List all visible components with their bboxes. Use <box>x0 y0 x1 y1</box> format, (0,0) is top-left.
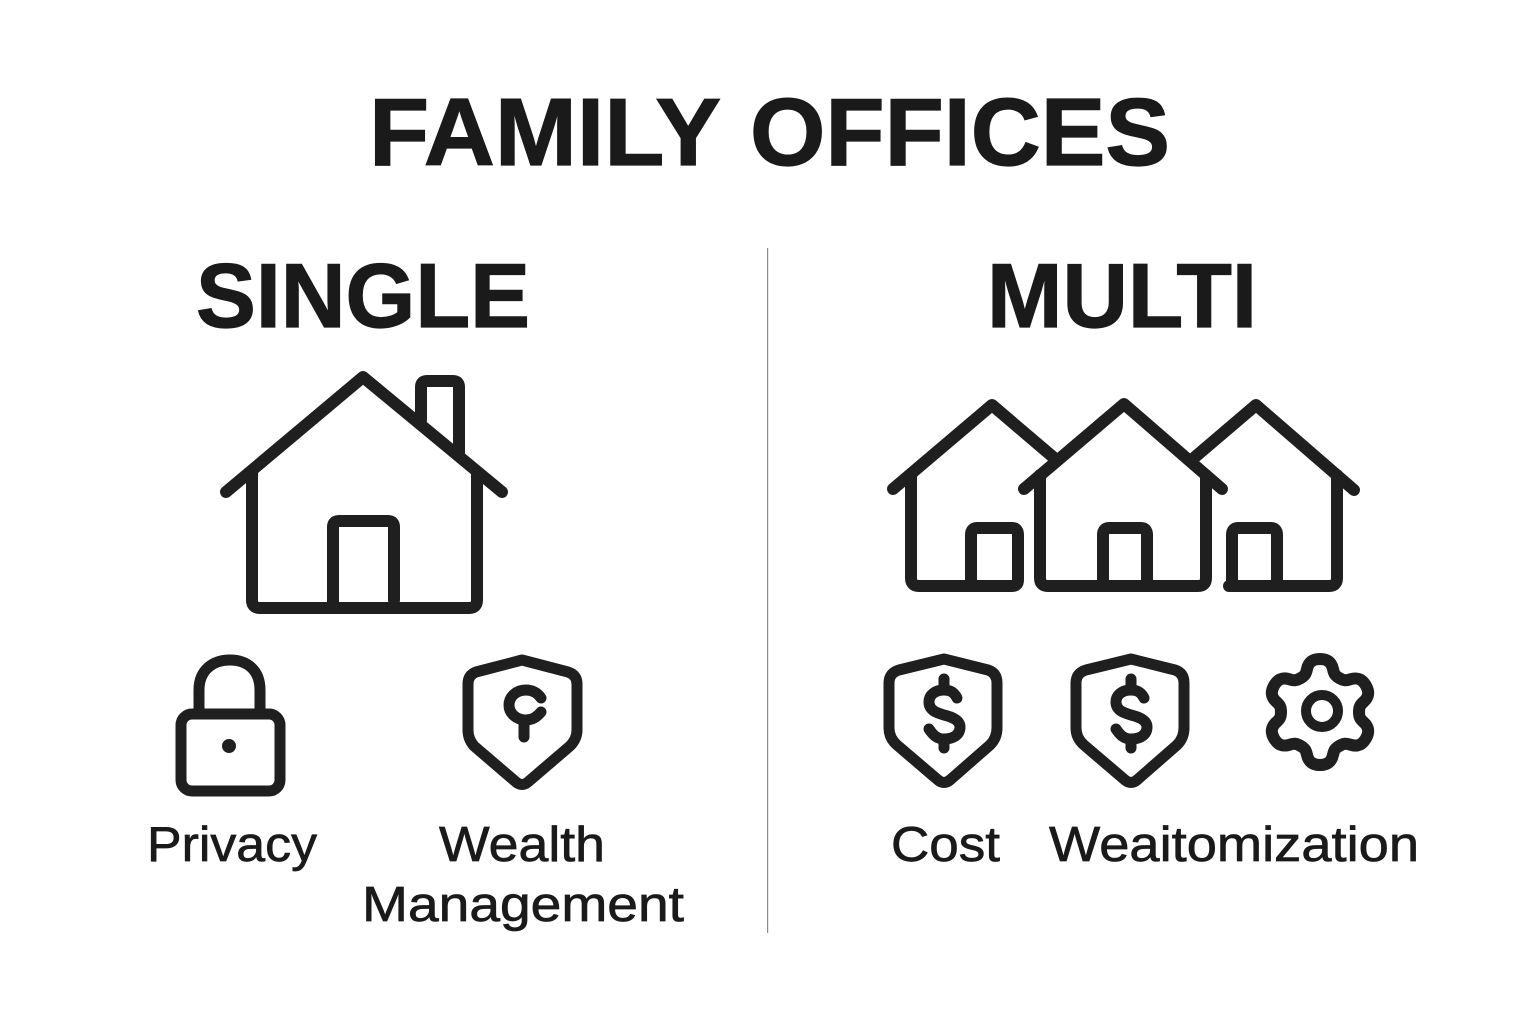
label: wealth management: Management <box>362 878 684 932</box>
panel: multi <box>889 246 1419 872</box>
icon: gear <box>1264 659 1376 765</box>
heading: single: SINGLE <box>196 246 530 347</box>
icon: shield with cent key <box>468 660 577 784</box>
icon: shield with dollar (automation) <box>1076 659 1184 782</box>
label: weaitomization: Weaitomization <box>1049 818 1419 872</box>
title: OFFICES <box>750 79 1170 186</box>
panel: single <box>147 246 684 932</box>
divider <box>767 248 768 933</box>
title <box>369 79 1170 186</box>
label: privacy: Privacy <box>147 818 318 872</box>
label: wealth management: Wealth <box>439 818 605 872</box>
label: cost: Cost <box>891 818 1000 872</box>
icon: three houses <box>893 404 1354 586</box>
heading: multi: MULTI <box>987 246 1257 347</box>
icon: shield with dollar (cost) <box>889 659 997 782</box>
icon: padlock <box>181 660 280 791</box>
label: wealth management <box>362 818 684 932</box>
icon: house with chimney <box>226 377 502 608</box>
title: FAMILY <box>369 79 721 186</box>
